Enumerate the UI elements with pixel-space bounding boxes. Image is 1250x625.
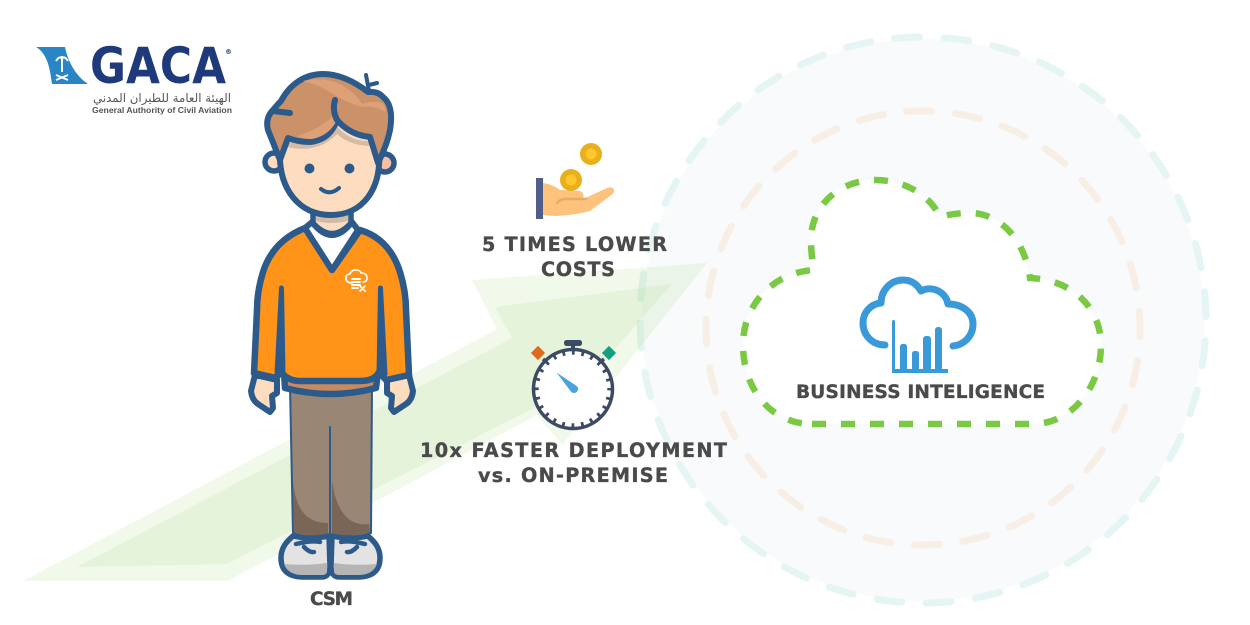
fringe shadow — [287, 126, 372, 149]
hair highlight — [297, 79, 385, 139]
growth arrow — [23, 263, 707, 581]
hand — [543, 183, 614, 216]
hair part — [273, 100, 337, 120]
cuff — [536, 178, 543, 219]
label: 10x faster deployment: vs. ON-PREMISE — [478, 464, 668, 487]
left ear — [265, 153, 283, 171]
arabic name: الهيئة العامة للطيران المدني — [93, 91, 231, 106]
panel: pale background disc — [642, 39, 1204, 601]
dashed cloud outline — [743, 180, 1101, 424]
label: CSM: CSM — [310, 589, 353, 610]
needle — [556, 372, 578, 393]
left hand — [251, 375, 277, 412]
english name: General Authority of Civil Aviation — [92, 105, 232, 115]
registered mark: ® — [225, 48, 232, 56]
panel: business intelligence cloud — [743, 180, 1101, 424]
mouth — [321, 188, 339, 192]
eyes — [304, 164, 354, 174]
sweater logo — [346, 270, 367, 291]
shirt collar — [305, 222, 358, 270]
coin top — [580, 143, 602, 165]
icon: hand with coins — [536, 143, 614, 219]
right shoe — [331, 536, 380, 577]
neck — [313, 208, 351, 234]
face — [280, 120, 379, 215]
icon: blue flag emblem — [36, 47, 88, 84]
icon: cloud with bar chart — [863, 280, 973, 373]
icon: stopwatch — [531, 340, 616, 428]
hair — [267, 74, 391, 163]
label: business inteligence: BUSINESS INTELIGENCE — [796, 382, 1045, 403]
sweater — [254, 228, 409, 381]
label: 10x faster deployment — [420, 439, 727, 487]
right hand — [387, 375, 413, 412]
label: 5 times lower costs: 5 TIMES LOWER — [482, 233, 667, 256]
character: CSM person — [251, 74, 413, 577]
outer dashed ring — [613, 10, 1233, 625]
sweater hem — [284, 372, 378, 394]
dial — [534, 350, 612, 428]
green button — [602, 346, 616, 360]
label: 5 times lower costs: COSTS — [541, 258, 615, 281]
sleeve fold left — [277, 288, 283, 374]
orange button — [531, 346, 545, 360]
hand crease — [557, 199, 587, 204]
trousers — [290, 386, 372, 537]
label: 5 times lower costs — [482, 233, 667, 281]
inner dashed ring — [690, 95, 1156, 561]
neck shadow — [316, 213, 348, 223]
coin lower — [560, 169, 582, 191]
cowlick — [366, 75, 377, 91]
label: 10x faster deployment: 10x FASTER DEPLOYMENT — [420, 439, 727, 462]
right ear — [376, 154, 394, 172]
left shoe — [281, 536, 330, 577]
logo: GACA — [36, 37, 232, 115]
sleeve fold right — [379, 288, 385, 374]
wordmark: GACA — [90, 37, 226, 95]
